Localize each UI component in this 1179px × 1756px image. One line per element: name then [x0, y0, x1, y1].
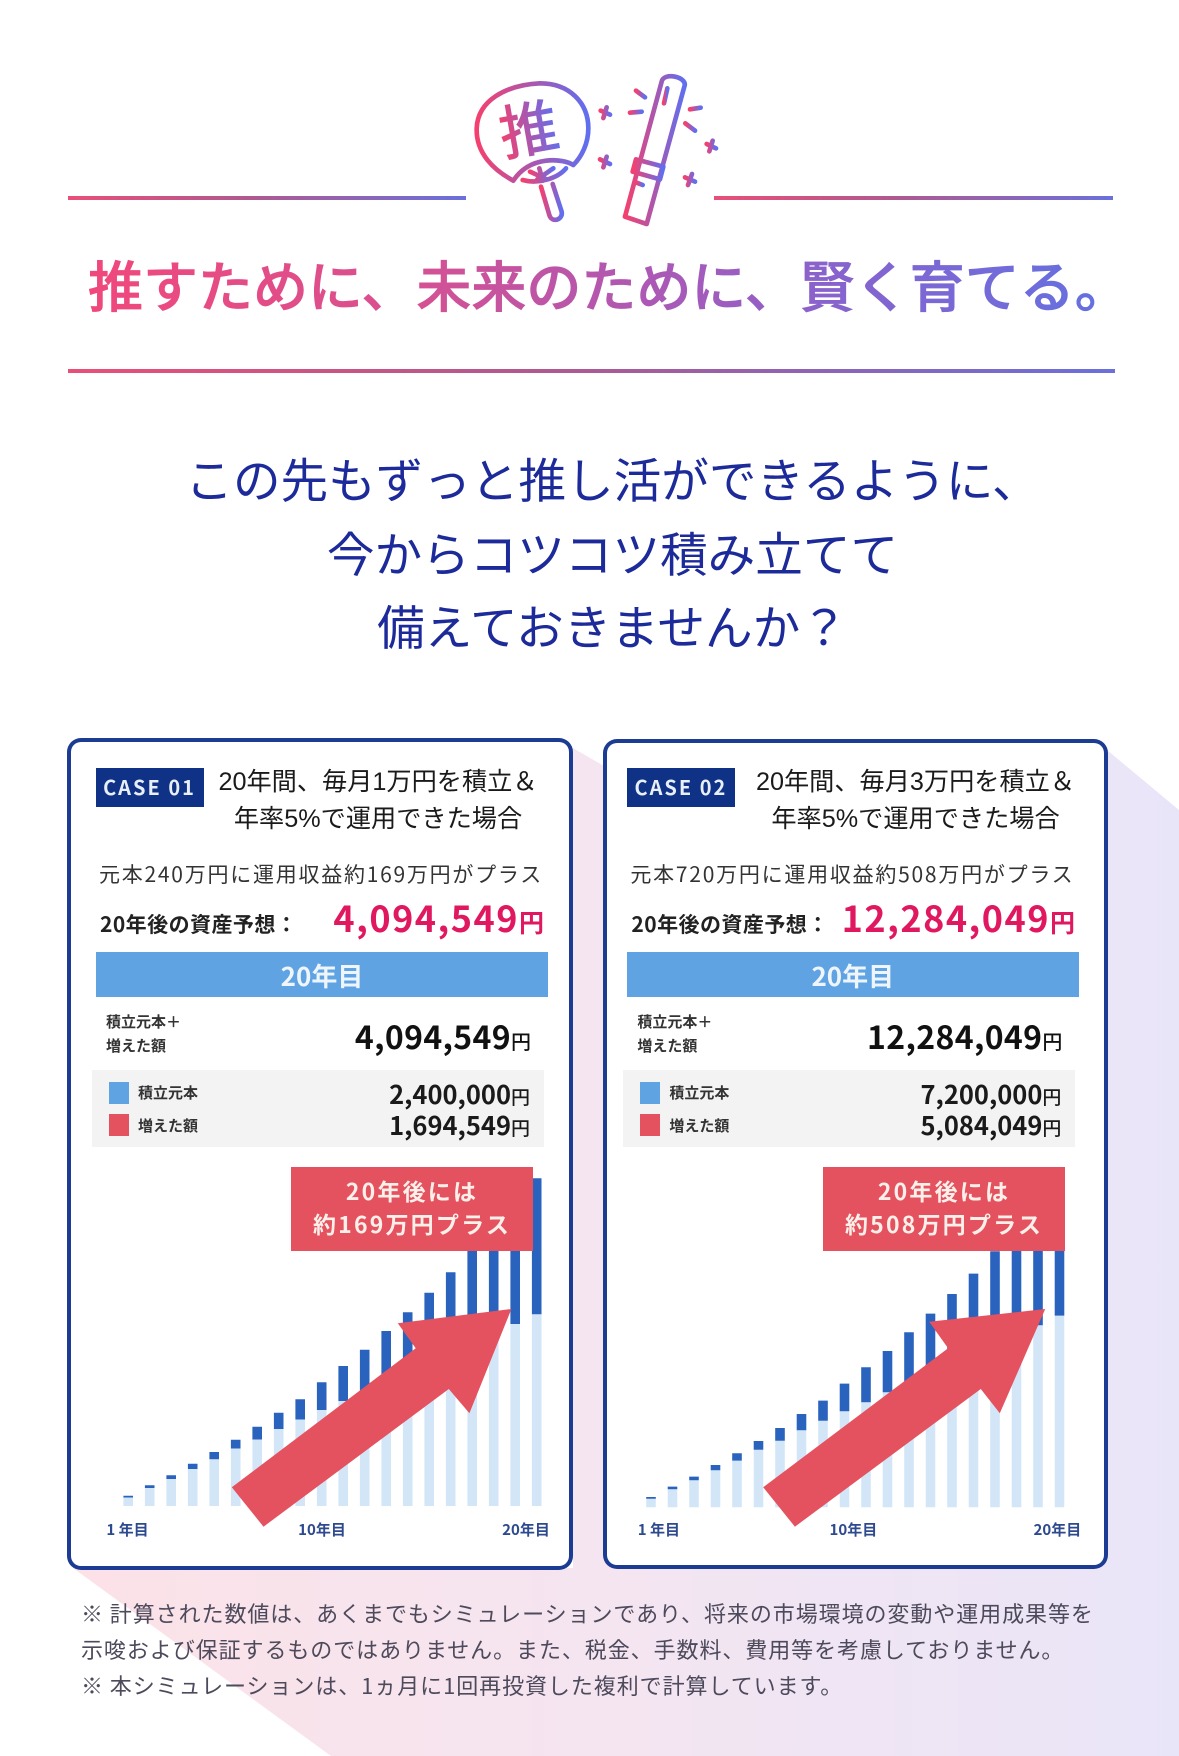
forecast label: 20年後の資産予想： [100, 909, 297, 939]
axis label: year 1: 1 年目 [638, 1519, 680, 1540]
principal value: 7,200,000円 [920, 1075, 1061, 1112]
legend: gain swatch [640, 1114, 660, 1136]
case title: 20年間、毎月3万円を積立＆ [756, 768, 1075, 796]
axis label: year 20: 20年目 [1034, 1519, 1081, 1540]
icon: uchiwa fan and penlight [474, 74, 718, 226]
callout: 508万円 plus: 約508万円プラス [845, 1206, 1043, 1240]
axis label: year 10: 10年目 [298, 1519, 346, 1540]
total label: 増えた額 [637, 1035, 697, 1056]
total label [106, 1011, 181, 1056]
case title: 年率5%で運用できた場合 [771, 804, 1060, 832]
bar chart with arrow [123, 1178, 542, 1527]
case title [756, 768, 1075, 832]
year bar: 20年目 [811, 957, 894, 994]
total label: 増えた額 [106, 1035, 166, 1056]
forecast value: 12,284,049円 [842, 891, 1075, 943]
heading bottom divider [68, 369, 1115, 373]
case badge: CASE 01 [103, 772, 196, 801]
legend: principal label: 積立元本 [669, 1082, 729, 1103]
total label: 積立元本＋ [106, 1011, 181, 1032]
icon: uchiwa fan and penlight: 推 [492, 79, 565, 174]
panel: case 01 [67, 738, 573, 1570]
subheading text [185, 443, 1040, 659]
panel: case 02 [603, 739, 1108, 1569]
breakdown box [92, 1070, 544, 1147]
callout: 169万円 plus: 20年後には [346, 1173, 478, 1207]
footnote text: ※ 本シミュレーションは、1ヵ月に1回再投資した複利で計算しています。 [81, 1668, 843, 1700]
footnote text [81, 1596, 1094, 1700]
legend: gain label: 増えた額 [669, 1115, 729, 1136]
year bar [627, 952, 1079, 997]
legend: principal swatch [640, 1082, 660, 1104]
axis label: year 10: 10年目 [830, 1519, 877, 1540]
axis label: year 1: 1 年目 [106, 1519, 149, 1540]
case badge [627, 768, 735, 807]
callout: 508万円 plus: 20年後には [878, 1173, 1010, 1207]
year bar [96, 952, 548, 997]
forecast value: 4,094,549円 [333, 891, 544, 943]
year bar: 20年目 [281, 957, 363, 994]
callout: 169万円 plus [291, 1167, 533, 1251]
legend: principal swatch [108, 1082, 129, 1104]
case title: 年率5%で運用できた場合 [234, 804, 522, 832]
principal and gain summary: 元本720万円に運用収益約508万円がプラス [630, 859, 1074, 889]
legend: principal label: 積立元本 [138, 1082, 198, 1103]
case title [218, 768, 538, 832]
case badge: CASE 02 [634, 772, 727, 801]
subheading text: 備えておきませんか？ [377, 590, 848, 659]
principal value: 2,400,000円 [389, 1075, 530, 1112]
breakdown box [623, 1070, 1075, 1147]
footnote text: 示唆および保証するものではありません。また、税金、手数料、費用等を考慮しておりません。 [81, 1632, 1064, 1664]
left top divider [68, 196, 466, 200]
total value: 4,094,549円 [355, 1013, 531, 1059]
gain value: 5,084,049円 [920, 1106, 1061, 1143]
subheading text: 今からコツコツ積み立てて [327, 516, 898, 586]
right top divider [714, 196, 1113, 200]
callout: 169万円 plus: 約169万円プラス [313, 1206, 511, 1240]
footnote text: ※ 計算された数値は、あくまでもシミュレーションであり、将来の市場環境の変動や運用成果等を [81, 1596, 1094, 1628]
forecast label: 20年後の資産予想： [631, 909, 829, 939]
case badge [96, 768, 204, 807]
bar chart with arrow [646, 1251, 1064, 1527]
legend: gain swatch [108, 1114, 129, 1136]
total value: 12,284,049円 [867, 1013, 1062, 1059]
legend: gain label: 増えた額 [138, 1115, 198, 1136]
total label [637, 1011, 712, 1056]
axis label: year 20: 20年目 [502, 1519, 550, 1540]
main heading: 推すために、未来のために、賢く育てる。 [88, 243, 1130, 323]
callout: 508万円 plus [823, 1167, 1065, 1251]
principal and gain summary: 元本240万円に運用収益約169万円がプラス [99, 859, 543, 889]
case title: 20年間、毎月1万円を積立＆ [218, 768, 538, 796]
subheading text: この先もずっと推し活ができるように、 [185, 443, 1040, 512]
gain value: 1,694,549円 [389, 1106, 530, 1143]
total label: 積立元本＋ [637, 1011, 712, 1032]
